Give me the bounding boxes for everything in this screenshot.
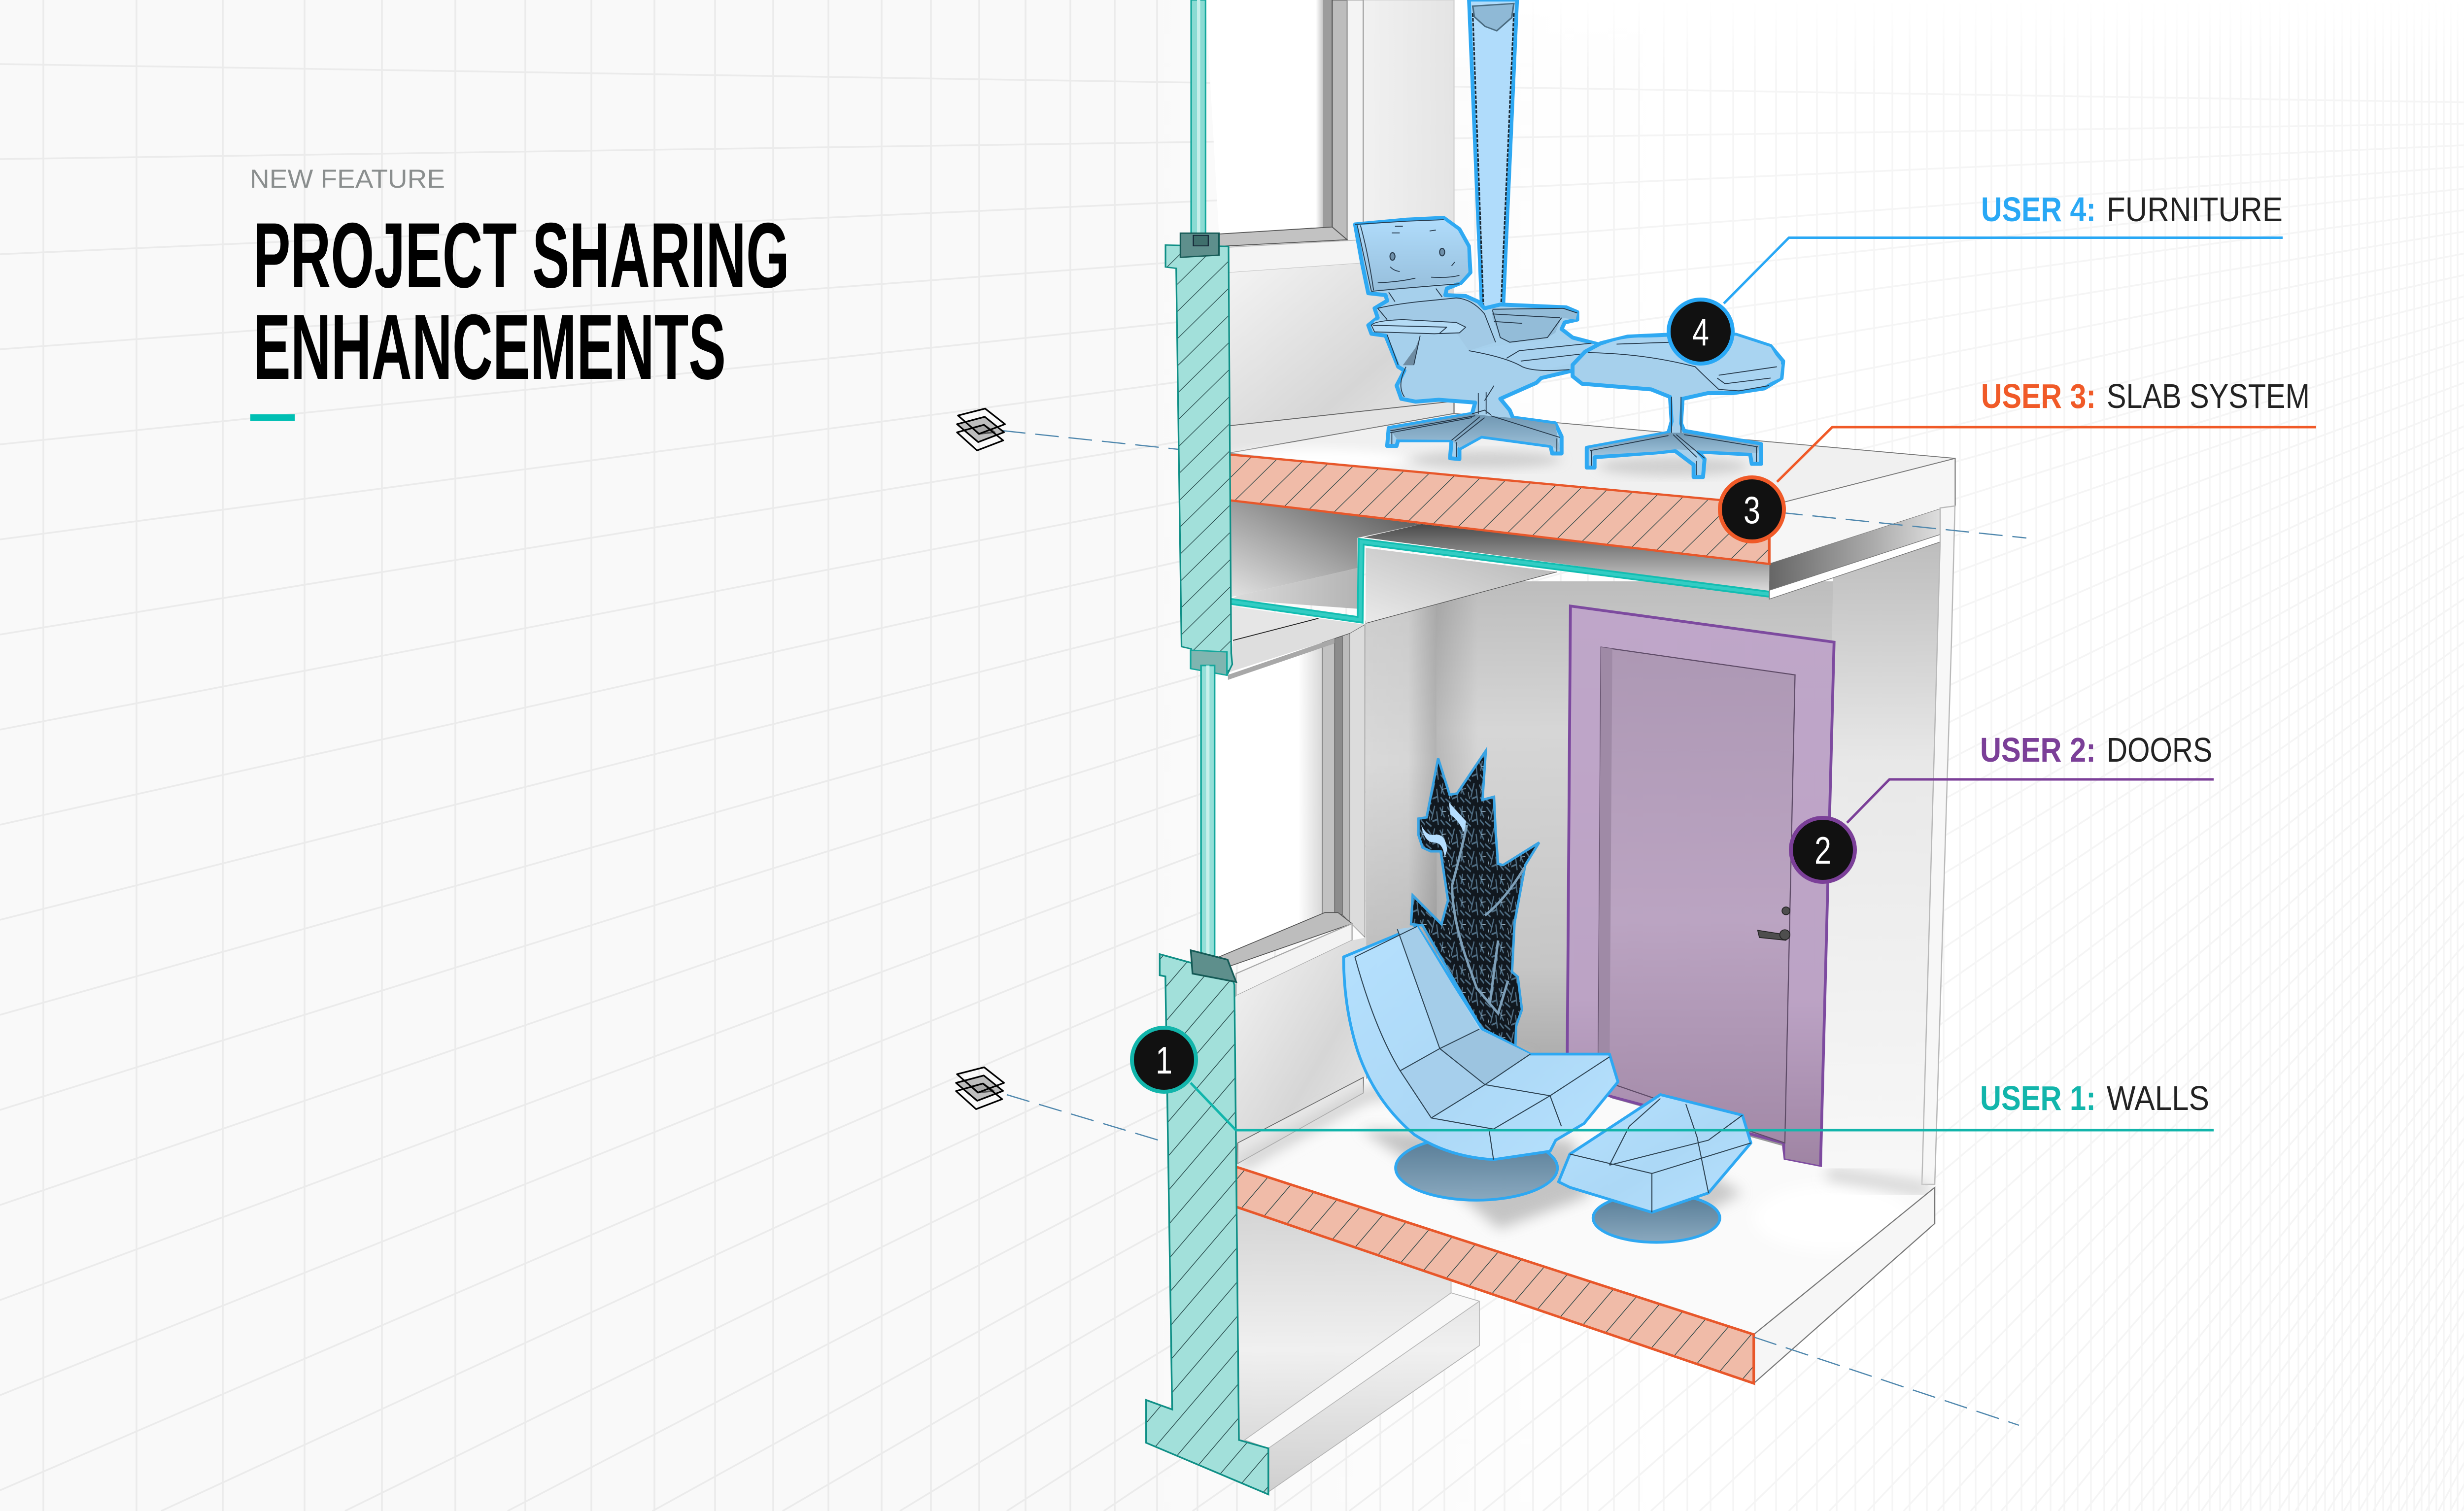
plant strands [1452, 825, 1524, 1013]
ottoman base [1589, 433, 1760, 455]
chair back cushion [1357, 219, 1468, 291]
wall column [1365, 591, 1437, 1079]
lounge chair and ottoman [1355, 218, 1783, 477]
marker 1 [1132, 1028, 1196, 1092]
upper glazing [1191, 0, 1205, 235]
lower floor [1236, 1054, 1935, 1335]
soffit edge [1769, 535, 1940, 599]
ottoman detail lines [1588, 342, 1777, 475]
icon: layers lower [956, 1067, 1004, 1109]
floor shading [1239, 1063, 1929, 1251]
lamp wedge [1469, 0, 1517, 308]
label: user 3 slab system [1981, 377, 2310, 415]
lower window bottom frame [1216, 912, 1352, 971]
chair right arm [1492, 308, 1577, 342]
chair wire lines [1355, 926, 1609, 1160]
head panel [1232, 606, 1318, 640]
door casing [1567, 606, 1834, 1167]
marker 3: 3 [1744, 488, 1760, 532]
lower floor building shell [1146, 606, 1935, 1494]
ottoman silhouette [1573, 335, 1783, 477]
room right wall [1820, 535, 1940, 1187]
plant highlights [1421, 802, 1466, 858]
lower sill [1236, 924, 1352, 996]
upper floor building shell [1165, 0, 1955, 675]
swivel chair group [1343, 926, 1751, 1242]
upper window glass [1205, 0, 1323, 234]
callout line 3 [1777, 427, 2316, 482]
callout line 4 [1724, 237, 2283, 303]
ottoman lines [1570, 1099, 1751, 1212]
wall below slab [1236, 1207, 1479, 1493]
swivel chair [1343, 926, 1618, 1200]
bulkhead face [1366, 548, 1557, 623]
marker 1: 1 [1156, 1039, 1172, 1082]
lower glazing [1201, 666, 1215, 957]
chair shaded panels [1397, 926, 1530, 1118]
chair buttons [1390, 248, 1445, 260]
plenum floor [1231, 568, 1357, 609]
wall section upper [1165, 245, 1232, 675]
title [253, 203, 789, 399]
room corner shadow [1435, 581, 1478, 1057]
marker 2: 2 [1814, 829, 1831, 872]
slab section orange [1229, 454, 1769, 564]
marker 4: 4 [1692, 310, 1709, 354]
title: PROJECT SHARING [253, 203, 789, 307]
upper slab top surface [1229, 413, 1955, 506]
upper dashed axis, left [1002, 431, 1183, 450]
upper window frame [1219, 0, 1363, 264]
ottoman top cushion [1588, 336, 1781, 391]
lower wall panel [1236, 938, 1366, 1160]
ottoman floor shadow [1598, 457, 1748, 476]
lower sill frame [1191, 950, 1236, 982]
ottoman body [1559, 1095, 1751, 1212]
slab section orange lower [1236, 1167, 1754, 1383]
icon: layers upper [957, 408, 1005, 450]
ottoman disc [1593, 1193, 1720, 1242]
label: user 2 doors: DOORS [2107, 731, 2212, 769]
wall section lower [1146, 954, 1268, 1494]
label: user 3 slab system: SLAB SYSTEM [2107, 377, 2310, 415]
marker 3 [1720, 477, 1784, 541]
plenum and lower window head [1213, 500, 1769, 963]
label: user 2 doors [1980, 731, 2212, 769]
marker 4 [1669, 300, 1733, 364]
column shading [1365, 591, 1437, 1079]
label: user 3 slab system: USER 3: [1981, 377, 2096, 415]
label: user 4 furniture: USER 4: [1981, 190, 2096, 229]
lower dashed axis, left [1007, 1095, 1237, 1164]
label: user 1 walls: WALLS [2107, 1079, 2209, 1117]
slab right side [1769, 458, 1955, 564]
callout line 1 [1191, 1083, 2214, 1130]
slab highlight [1224, 449, 1406, 470]
label: user 1 walls: USER 1: [1980, 1079, 2096, 1117]
plant [1411, 751, 1539, 1046]
lounge chair silhouette [1355, 218, 1598, 459]
upper sill [1229, 240, 1363, 273]
chair left arm [1371, 320, 1466, 334]
title: ENHANCEMENTS [253, 295, 726, 399]
duct shadow [1364, 524, 1769, 592]
chair base [1390, 414, 1560, 452]
upper dashed axis, right [1779, 512, 2026, 538]
chair seat [1469, 339, 1595, 370]
head reveal [1228, 618, 1365, 675]
room back wall [1435, 581, 1838, 1173]
lower baseboard [1238, 1077, 1364, 1164]
ledge top [1245, 1293, 1479, 1448]
marker 2 [1791, 818, 1855, 882]
lower slab right side [1754, 1187, 1935, 1383]
upper baseboard [1229, 401, 1454, 453]
lower window frame strips [1228, 625, 1365, 938]
ceiling section teal [1229, 541, 1769, 620]
right wall pier [1922, 506, 1955, 1184]
label: user 1 walls [1980, 1079, 2209, 1117]
recess right [1769, 509, 1940, 590]
eyebrow: new feature: NEW FEATURE [250, 165, 445, 194]
title accent bar [250, 414, 295, 421]
plenum back wall [1231, 500, 1421, 597]
lower dashed axis, right [1754, 1337, 2019, 1425]
head frame [1180, 233, 1227, 675]
chair under shadow [1403, 336, 1420, 365]
lower window glass [1213, 638, 1335, 963]
callout line 2 [1847, 779, 2214, 823]
label: user 4 furniture [1981, 190, 2283, 229]
chair mid cushion [1378, 298, 1496, 351]
chair detail lines [1355, 220, 1591, 457]
upper wall panel [1229, 263, 1454, 453]
chair body [1343, 926, 1618, 1160]
swivel ottoman [1559, 1095, 1751, 1242]
chair floor shadow [1411, 451, 1561, 469]
chair disc base [1396, 1136, 1557, 1200]
door handle [1758, 907, 1790, 940]
label: user 4 furniture: FURNITURE [2107, 190, 2283, 229]
label: user 2 doors: USER 2: [1980, 731, 2096, 769]
door panel [1598, 647, 1795, 1143]
upper right wall reveal [1363, 0, 1454, 264]
plant silhouette [1411, 751, 1539, 1046]
